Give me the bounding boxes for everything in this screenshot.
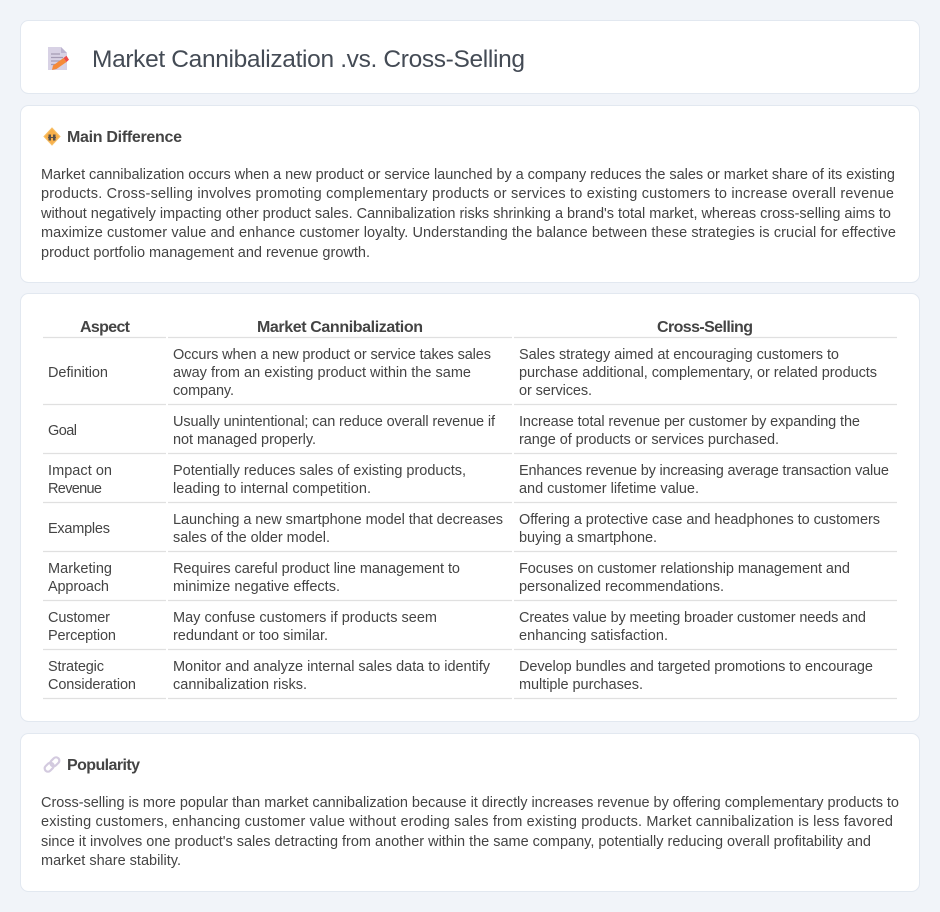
- table header row: [43, 319, 897, 338]
- table row: customer perception: Customer: [48, 610, 110, 626]
- table row: definition: or services.: [519, 383, 592, 399]
- table row: impact on revenue: [43, 463, 897, 502]
- table row: definition: Occurs when a new product or service takes sales: [173, 347, 491, 363]
- table row: examples: Launching a new smartphone model that decreases: [173, 512, 503, 528]
- panel: popularity: [20, 734, 920, 892]
- panel: comparison table: [20, 294, 920, 722]
- table row: strategic consideration: Consideration: [48, 677, 136, 693]
- table row: customer perception: [43, 610, 897, 650]
- panel: main difference: [20, 106, 920, 282]
- table row: customer perception: May confuse customers if products seem: [173, 610, 437, 626]
- table row: definition: company.: [173, 383, 234, 399]
- table row: impact on revenue: Potentially reduces sales of existing products,: [173, 463, 466, 479]
- table row: marketing approach: Focuses on customer relationship management and: [519, 561, 850, 577]
- text block: popularity paragraph: [41, 795, 899, 869]
- panel: header: [20, 20, 920, 94]
- icon: chain link: [43, 756, 61, 773]
- table row: examples: Examples: [48, 521, 110, 537]
- table row: impact on revenue: Enhances revenue by increasing average transaction value: [519, 463, 889, 479]
- table row: goal: [43, 414, 897, 454]
- table row: examples: Offering a protective case and headphones to customers: [519, 512, 880, 528]
- table row: marketing approach: personalized recommendations.: [519, 579, 724, 595]
- text block: popularity paragraph: since it involves one product's sales detracting from another within the same company, potentially reducing overall profitability and: [41, 834, 871, 850]
- table row: marketing approach: Approach: [48, 579, 109, 595]
- table row: examples: sales of the older model.: [173, 530, 330, 546]
- icon: document with pencil: [48, 47, 69, 70]
- table row: impact on revenue: Revenue: [48, 481, 102, 497]
- table row: impact on revenue: leading to internal competition.: [173, 481, 371, 497]
- table row: definition: purchase additional, complementary, or related products: [519, 365, 877, 381]
- heading: popularity: Popularity: [67, 757, 140, 774]
- table row: definition: Sales strategy aimed at encouraging customers to: [519, 347, 839, 363]
- table row: strategic consideration: Monitor and analyze internal sales data to identify: [173, 659, 491, 675]
- icon: warning diamond: [44, 128, 60, 145]
- text block: main difference paragraph: product portfolio management and revenue growth.: [41, 245, 370, 261]
- table row: examples: buying a smartphone.: [519, 530, 657, 546]
- table row: impact on revenue: and customer lifetime value.: [519, 481, 699, 497]
- table row: strategic consideration: [43, 659, 897, 698]
- text block: main difference paragraph: [40, 167, 896, 261]
- table row: definition: away from an existing product within the same: [173, 365, 471, 381]
- table row: goal: Usually unintentional; can reduce overall revenue if: [173, 414, 496, 430]
- table header row: Aspect: [80, 319, 131, 336]
- table row: definition: Definition: [48, 365, 108, 381]
- table row: strategic consideration: cannibalization risks.: [173, 677, 307, 693]
- table row: impact on revenue: Impact on: [48, 463, 112, 479]
- table row: marketing approach: minimize negative effects.: [173, 579, 340, 595]
- table row: marketing approach: [43, 561, 897, 600]
- text block: popularity paragraph: existing customers, enhancing customer value without eroding sales from existing products. Market cannibalization is less favored: [41, 814, 893, 830]
- text block: main difference paragraph: Market cannibalization occurs when a new product or service launched by a company reduces the sales or market share of its existing: [41, 167, 895, 183]
- table row: strategic consideration: multiple purchases.: [519, 677, 643, 693]
- table row: goal: Goal: [48, 423, 77, 439]
- table row: goal: range of products or services purchased.: [519, 432, 779, 448]
- table header row: Cross-Selling: [657, 319, 753, 336]
- table row: customer perception: Perception: [48, 628, 116, 644]
- text block: popularity paragraph: Cross-selling is more popular than market cannibalization because it directly increases revenue by offering complementary products to: [41, 795, 899, 811]
- table row: marketing approach: Requires careful product line management to: [173, 561, 460, 577]
- text block: main difference paragraph: without negatively impacting other product sales. Cannibalization risks shrinking a brand's total market, whereas cross-selling aims to: [40, 206, 891, 222]
- table row: marketing approach: Marketing: [48, 561, 112, 577]
- text block: main difference paragraph: maximize customer value and enhance customer loyalty. Understanding the balance between these strategies is crucial for effective: [41, 225, 896, 241]
- table row: strategic consideration: Develop bundles and targeted promotions to encourage: [519, 659, 873, 675]
- heading: main difference: Main Difference: [67, 129, 182, 146]
- table row: strategic consideration: Strategic: [48, 659, 104, 675]
- title: Market Cannibalization .vs. Cross-Selling: [92, 46, 525, 73]
- text block: main difference paragraph: products. Cross-selling involves promoting complementary products or services to existing customers to increase overall revenue: [41, 186, 894, 202]
- table row: customer perception: Creates value by meeting broader customer needs and: [519, 610, 866, 626]
- table header row: Market Cannibalization: [257, 319, 423, 336]
- table row: goal: Increase total revenue per customer by expanding the: [519, 414, 860, 430]
- text block: popularity paragraph: market share stability.: [41, 853, 181, 869]
- table row: definition: [43, 347, 897, 404]
- table row: examples: [43, 512, 897, 552]
- table row: customer perception: redundant or too similar.: [173, 628, 328, 644]
- table row: goal: not managed properly.: [173, 432, 316, 448]
- table row: customer perception: enhancing satisfaction.: [519, 628, 668, 644]
